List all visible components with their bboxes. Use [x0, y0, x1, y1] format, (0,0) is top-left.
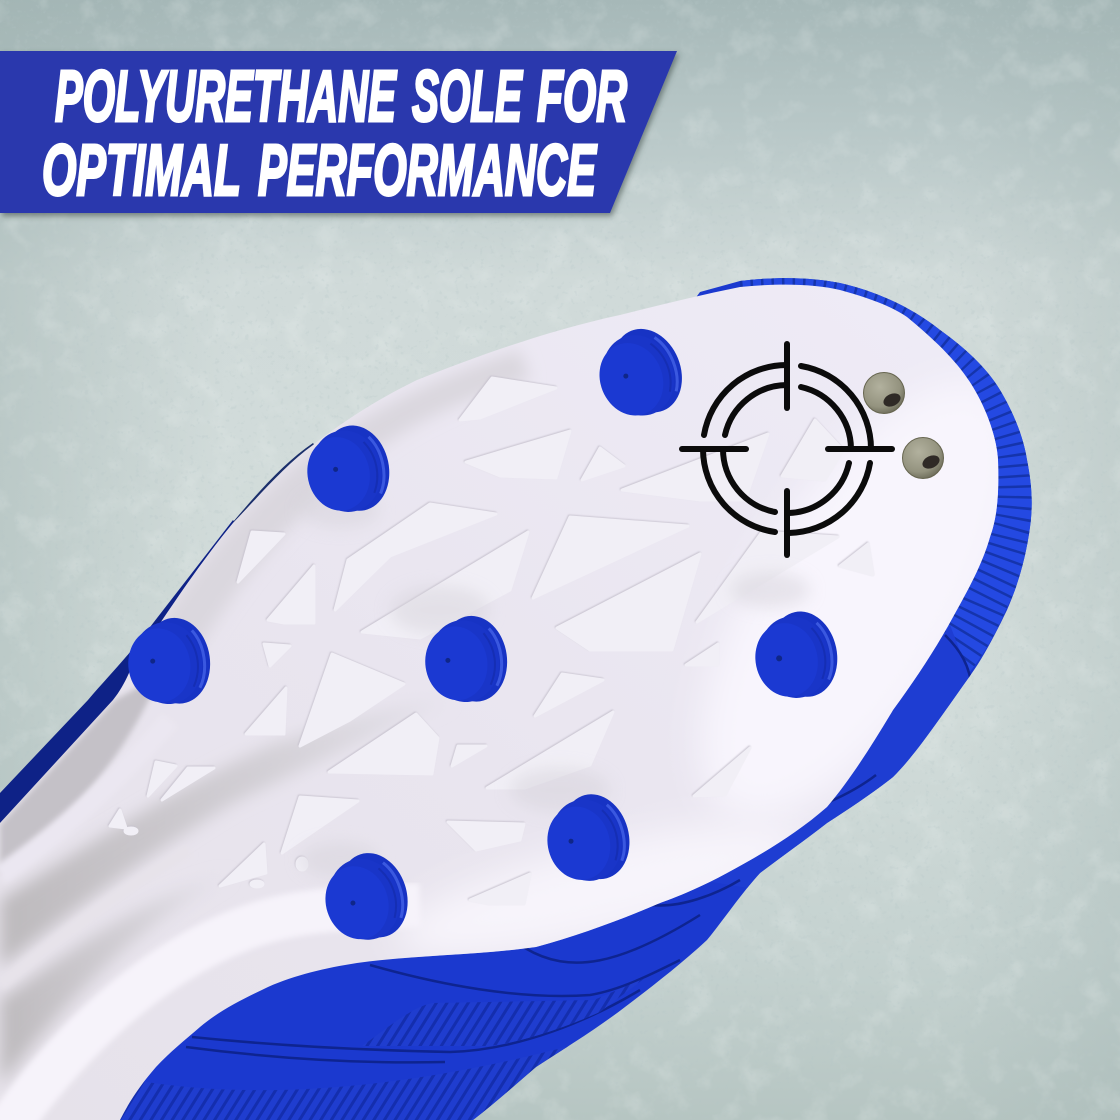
arch shading: [0, 675, 450, 1120]
ribbed panels: [362, 978, 645, 1046]
cleat 1: [586, 318, 694, 429]
cleat 4: [419, 612, 513, 708]
title text: OPTIMAL: [42, 131, 241, 211]
edge shading: [161, 352, 528, 638]
title text: FOR: [537, 57, 627, 137]
cleat 6: [537, 787, 639, 891]
title banner: [0, 51, 677, 213]
cleat shadows: [300, 492, 810, 878]
metal studs: [864, 372, 944, 478]
sole tread pattern: [110, 378, 873, 904]
shoe: [0, 270, 1082, 1120]
dark left edge band: [0, 640, 150, 825]
cleat 3: [122, 614, 216, 710]
title text: POLYURETHANE: [55, 57, 397, 137]
title text: [42, 57, 627, 211]
shoe upper: blue leather: [90, 270, 1050, 1120]
cleat 2: [299, 419, 397, 520]
sole plate: [0, 270, 1082, 1120]
stitching: [186, 635, 972, 1062]
cleat 5: [747, 605, 845, 706]
cleat 7: [314, 844, 418, 951]
title text: PERFORMANCE: [258, 131, 597, 211]
toe highlight: [704, 366, 998, 822]
title text: SOLE: [412, 57, 523, 137]
icon: target crosshair: [682, 344, 892, 555]
plain side panel: [747, 626, 970, 888]
banner shape: [0, 51, 677, 213]
ribbed toe rim: [740, 281, 1017, 660]
